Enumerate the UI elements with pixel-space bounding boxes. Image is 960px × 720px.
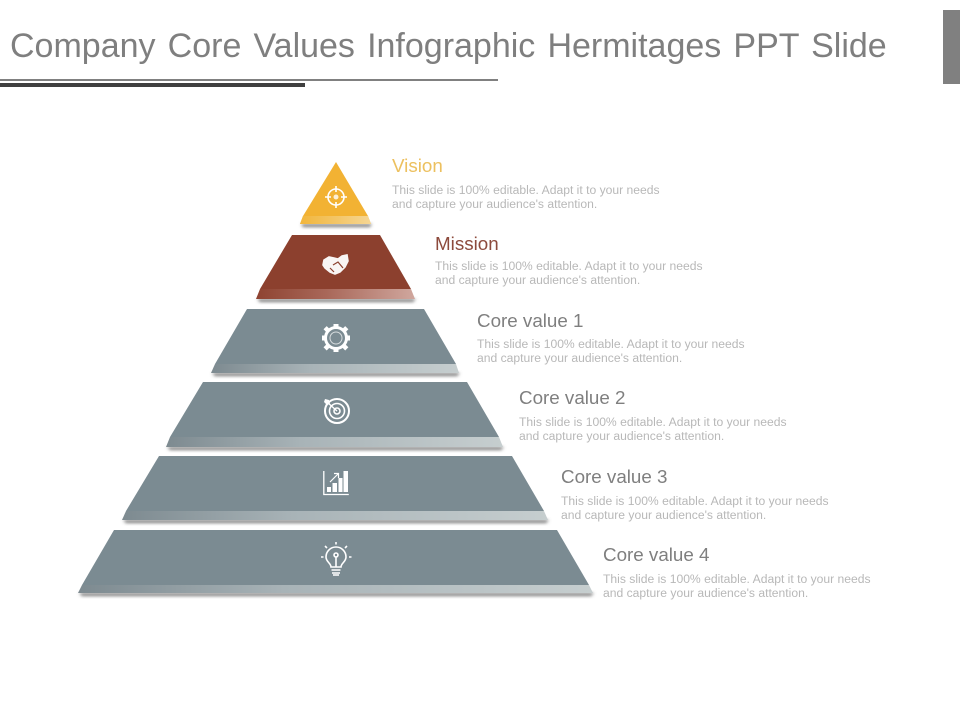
text block: core value 4: Core value 4 xyxy=(603,544,710,565)
text block: core value 3: This slide is 100% editable. Adapt it to your needs xyxy=(561,494,829,508)
text block: mission xyxy=(435,233,703,287)
tier: core value 1 xyxy=(211,309,460,376)
text block: vision xyxy=(392,155,660,211)
icon: target xyxy=(324,399,349,423)
text block: vision: and capture your audience's attention. xyxy=(392,197,597,211)
text block: mission: and capture your audience's attention. xyxy=(435,273,640,287)
text block: mission: Mission xyxy=(435,233,499,254)
text block: core value 1: and capture your audience's attention. xyxy=(477,351,682,365)
text block: core value 1 xyxy=(477,310,745,365)
text block: vision: Vision xyxy=(392,155,443,176)
icon: handshake xyxy=(323,255,348,274)
text block: core value 3: Core value 3 xyxy=(561,466,668,487)
text block: mission: This slide is 100% editable. Adapt it to your needs xyxy=(435,259,703,273)
corner tab xyxy=(943,10,960,84)
icon: rising bar chart xyxy=(324,471,349,494)
text block: core value 3 xyxy=(561,466,829,522)
pyramid xyxy=(78,162,594,596)
text block: core value 2: Core value 2 xyxy=(519,387,626,408)
text block: vision: This slide is 100% editable. Adapt it to your needs xyxy=(392,183,660,197)
text block: core value 4: This slide is 100% editable. Adapt it to your needs xyxy=(603,572,871,586)
icon: crosshair target xyxy=(325,186,347,208)
title: Company Core Values Infographic Hermitages PPT Slide xyxy=(10,27,887,65)
text block: core value 4 xyxy=(603,544,871,600)
icon: gear xyxy=(322,324,350,352)
text block: core value 2 xyxy=(519,387,787,443)
text block: core value 1: This slide is 100% editable. Adapt it to your needs xyxy=(477,337,745,351)
text block: core value 1: Core value 1 xyxy=(477,310,584,331)
icon: light bulb xyxy=(321,542,352,575)
text block: core value 4: and capture your audience's attention. xyxy=(603,586,808,600)
tier: core value 2 xyxy=(166,382,504,450)
tier: vision xyxy=(300,162,372,227)
tier: core value 4 xyxy=(78,530,594,596)
text block: core value 2: This slide is 100% editable. Adapt it to your needs xyxy=(519,415,787,429)
text block: core value 2: and capture your audience's attention. xyxy=(519,429,724,443)
title underline xyxy=(0,79,498,87)
tier: core value 3 xyxy=(122,456,549,523)
tier: mission xyxy=(256,235,416,302)
text block: core value 3: and capture your audience's attention. xyxy=(561,508,766,522)
